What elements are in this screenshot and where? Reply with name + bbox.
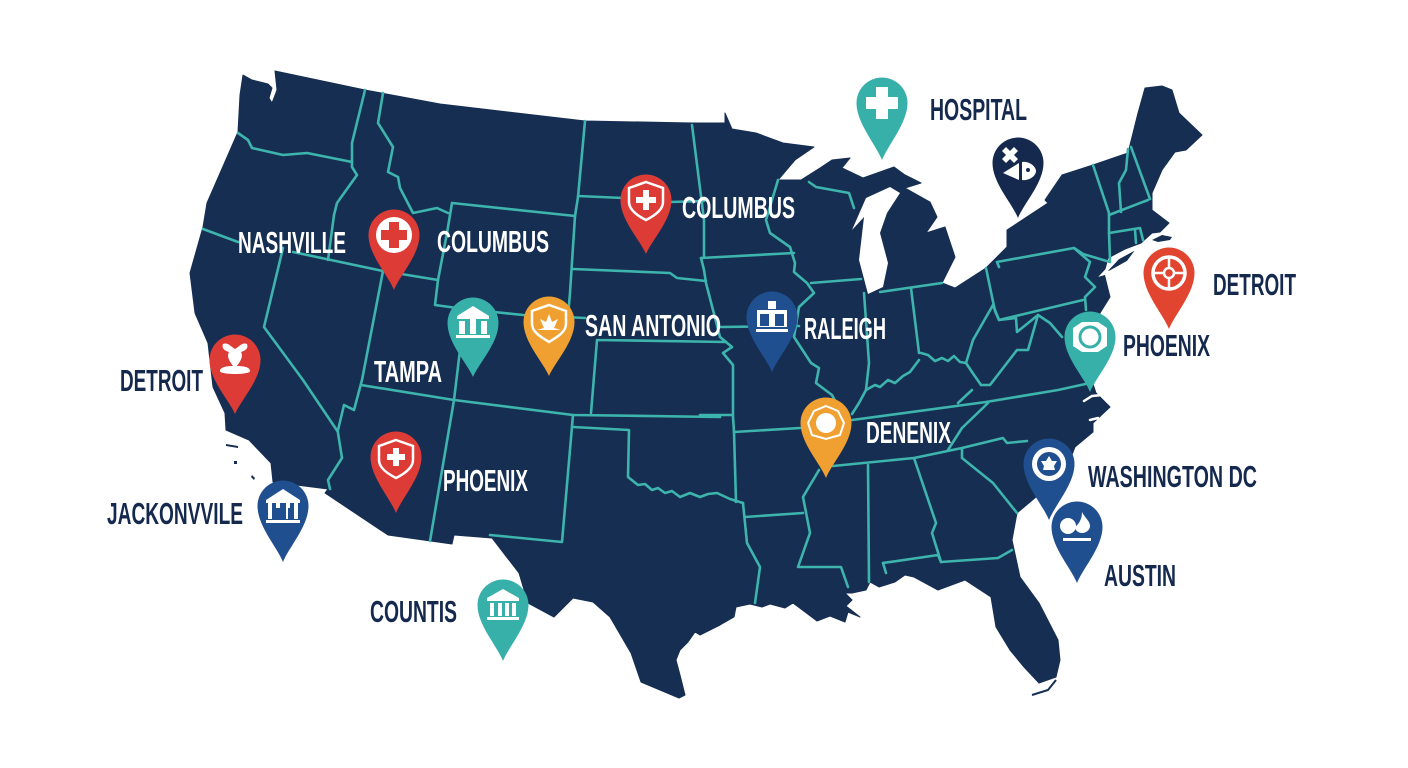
- pin: red wheel: [1144, 248, 1194, 329]
- pin: orange shield: [524, 296, 574, 376]
- label: Detroit east: DETROIT: [1213, 267, 1296, 302]
- label: Tampa: TAMPA: [374, 354, 442, 389]
- pin: teal courthouse: [478, 580, 528, 661]
- pin: teal building: [448, 298, 498, 377]
- Lake Michigan: [852, 187, 900, 294]
- pin: hospital teal: [856, 78, 908, 160]
- pin: dark fish and cross: [992, 138, 1044, 218]
- label: Jackonvville: JACKONVVILE: [107, 496, 243, 531]
- label: Nashville: NASHVILLE: [238, 225, 346, 260]
- label: Phoenix southwest: PHOENIX: [443, 463, 528, 498]
- label: Detroit west: DETROIT: [120, 363, 203, 398]
- label: Hospital: HOSPITAL: [930, 92, 1027, 127]
- pin: red shield Arizona: [370, 432, 422, 513]
- label: Austin: AUSTIN: [1104, 558, 1176, 593]
- label: Washington DC: WASHINGTON DC: [1088, 459, 1257, 494]
- Channel Islands: [226, 444, 255, 480]
- Long Island: [1103, 246, 1140, 274]
- state borders: [203, 90, 1150, 603]
- Nantucket islands: [1152, 235, 1172, 242]
- Outer Banks sounds: [1084, 395, 1102, 420]
- label: Phoenix east: PHOENIX: [1123, 328, 1210, 363]
- label: Denenix: DENENIX: [866, 415, 951, 450]
- pin: blue bank: [258, 480, 308, 562]
- pin: blue star badge: [1024, 438, 1074, 520]
- pin: blue desk: [746, 292, 798, 372]
- label: Columbus north: COLUMBUS: [682, 190, 795, 225]
- Florida Keys: [1032, 680, 1056, 695]
- land silhouette: [190, 71, 1202, 698]
- map: contiguous United States: [190, 71, 1202, 698]
- label: Countis: COUNTIS: [370, 594, 457, 629]
- pin: red California: [210, 334, 260, 414]
- pin: red medical cross: [368, 210, 420, 290]
- label: Raleigh: RALEIGH: [804, 311, 886, 346]
- pin: orange badge: [800, 398, 852, 478]
- pin: teal camera ring: [1064, 312, 1116, 392]
- label: Columbus west: COLUMBUS: [437, 224, 549, 259]
- pin: blue landscape: [1052, 502, 1102, 583]
- label: San Antonio: SAN ANTONIO: [585, 308, 721, 343]
- pin: red shield North Dakota: [620, 174, 672, 254]
